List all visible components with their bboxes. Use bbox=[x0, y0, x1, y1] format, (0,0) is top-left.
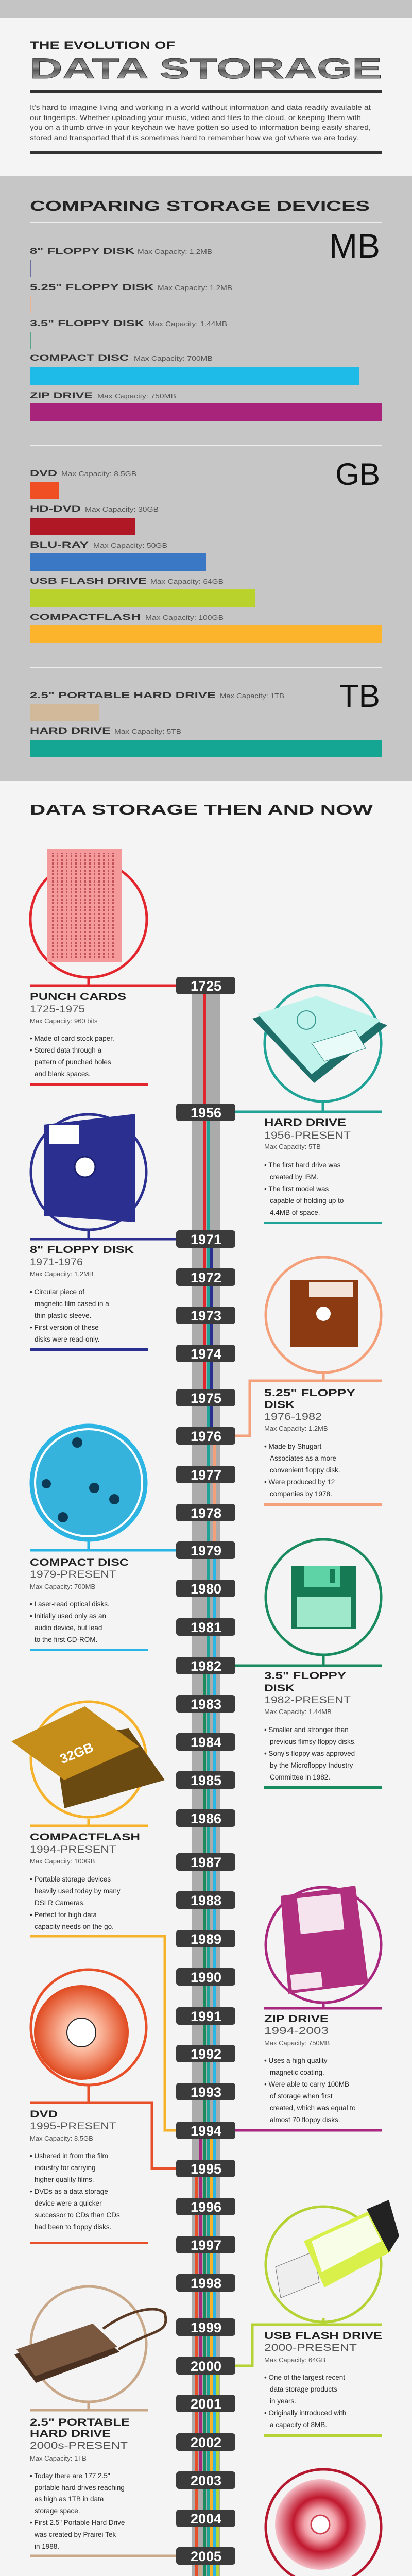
item: compact disc: audio device, but lead bbox=[35, 1624, 102, 1632]
item: dvd bbox=[30, 1970, 148, 2244]
item: compactflash: 1994-PRESENT bbox=[30, 1844, 116, 1855]
item: compact disc: • Laser-read optical disks. bbox=[30, 1600, 110, 1608]
bar: compactflash: Max Capacity: 100GB bbox=[145, 614, 224, 621]
icon: hd-dvd disc bbox=[266, 2469, 381, 2576]
year badges: 1999 bbox=[191, 2320, 221, 2335]
item: 3.5 floppy: DISK bbox=[264, 1683, 295, 1694]
item: portable hard drive: • Today there are 177 2.5" bbox=[30, 2472, 110, 2480]
item: zip drive: Max Capacity: 750MB bbox=[264, 2039, 330, 2047]
item: compactflash: • Perfect for high data bbox=[30, 1911, 97, 1919]
item: punch cards: Max Capacity: 960 bits bbox=[30, 1017, 98, 1025]
item: hd-dvd bbox=[264, 2469, 382, 2576]
bar: compact disc: Max Capacity: 700MB bbox=[134, 354, 213, 362]
item: punch cards: • Made of card stock paper. bbox=[30, 1035, 114, 1042]
bar: hard drive: HARD DRIVE bbox=[30, 726, 111, 736]
year badges: 1974 bbox=[191, 1346, 221, 1362]
item: dvd: • DVDs as a data storage bbox=[30, 2188, 108, 2195]
item: compactflash: Max Capacity: 100GB bbox=[30, 1857, 95, 1865]
item: compact disc: COMPACT DISC bbox=[30, 1557, 129, 1568]
item: compact disc bbox=[30, 1425, 148, 1651]
year badges: 2000 bbox=[191, 2359, 221, 2374]
item: portable hard drive: was created by Prairei Tek bbox=[34, 2531, 116, 2538]
item: compactflash: heavily used today by many bbox=[35, 1887, 121, 1895]
year badges: 1981 bbox=[191, 1620, 221, 1635]
item: compact disc: • Initially used only as an bbox=[30, 1612, 106, 1620]
intro paragraph: our fingertips. Whether uploading your music, video and files to the cloud, or keeping them with bbox=[30, 114, 361, 122]
item: portable hard drive: 2.5" PORTABLE bbox=[30, 2417, 130, 2428]
year badges: 2002 bbox=[191, 2435, 221, 2450]
item: portable hard drive: HARD DRIVE bbox=[30, 2429, 111, 2439]
heading: comparing: COMPARING STORAGE DEVICES bbox=[30, 198, 370, 214]
item: hard drive: capable of holding up to bbox=[270, 1197, 344, 1205]
item: dvd: • Ushered in from the film bbox=[30, 2152, 108, 2160]
bar: portable hd: 2.5" PORTABLE HARD DRIVE bbox=[30, 690, 216, 700]
item: usb flash drive: 2000-PRESENT bbox=[264, 2343, 357, 2353]
timeline spine bbox=[192, 986, 220, 2576]
bar: zip drive: ZIP DRIVE bbox=[30, 391, 93, 400]
item: 8in floppy: • First version of these bbox=[30, 1324, 99, 1331]
item: hard drive: created by IBM. bbox=[270, 1173, 319, 1181]
intro paragraph: It's hard to imagine living and working in a world without information and data readily available at bbox=[30, 104, 371, 111]
item: punch cards bbox=[30, 849, 148, 1086]
item: zip drive: magnetic coating. bbox=[270, 2069, 324, 2076]
item: 3.5 floppy: Max Capacity: 1.44MB bbox=[264, 1708, 332, 1716]
bar: dvd: DVD bbox=[30, 468, 57, 478]
bar: usb: USB FLASH DRIVE bbox=[30, 576, 147, 586]
item: 5.25 floppy: DISK bbox=[264, 1400, 295, 1411]
icon: punch card bbox=[30, 849, 147, 977]
bar: blu-ray: Max Capacity: 50GB bbox=[93, 541, 167, 549]
item: usb flash drive: data storage products bbox=[270, 2385, 337, 2393]
bar: 3.5 floppy: 3.5" FLOPPY DISK bbox=[30, 318, 145, 328]
item: 8in floppy: Max Capacity: 1.2MB bbox=[30, 1270, 94, 1278]
intro paragraph: you on a thumb drive in your keychain we have gotten so used to information being easily shared, bbox=[30, 124, 371, 131]
item: compactflash: capacity needs on the go. bbox=[35, 1923, 114, 1930]
year badges: 2003 bbox=[191, 2473, 221, 2488]
item: dvd: industry for carrying bbox=[35, 2164, 96, 2172]
year badges: 1995 bbox=[191, 2161, 221, 2177]
bar: dvd bbox=[30, 468, 136, 499]
unit TB: TB bbox=[339, 679, 380, 714]
year badges: 1997 bbox=[191, 2238, 221, 2253]
item: 5.25 floppy: companies by 1978. bbox=[270, 1490, 332, 1498]
year badges: 1985 bbox=[191, 1773, 221, 1788]
year badges: 1725 bbox=[191, 978, 221, 994]
year badges: 2001 bbox=[191, 2396, 221, 2412]
item: usb flash drive: USB FLASH DRIVE bbox=[264, 2331, 382, 2342]
year badges: 1972 bbox=[191, 1270, 221, 1285]
bar: zip drive: Max Capacity: 750MB bbox=[97, 392, 176, 400]
item: hard drive bbox=[252, 985, 387, 1224]
year badges: 1984 bbox=[191, 1735, 221, 1750]
year badges: 1973 bbox=[191, 1308, 221, 1324]
item: zip drive: almost 70 floppy disks. bbox=[270, 2116, 340, 2124]
icon: dvd disc bbox=[31, 1970, 146, 2085]
item: zip drive: • Were able to carry 100MB bbox=[264, 2080, 349, 2088]
intro paragraph: stored and transported that it is sometimes hard to remember how we got where we are today. bbox=[30, 134, 358, 142]
year badges: 1990 bbox=[191, 1970, 221, 1985]
item: 5.25 floppy: Associates as a more bbox=[270, 1454, 336, 1462]
item: hard drive: 1956-PRESENT bbox=[264, 1130, 351, 1141]
header bbox=[30, 40, 382, 154]
icon: usb stick bbox=[266, 2200, 399, 2322]
item: 3.5 floppy: 3.5" FLOPPY bbox=[264, 1671, 346, 1682]
year badges: 1989 bbox=[191, 1931, 221, 1947]
bar: compactflash bbox=[30, 612, 382, 643]
year badges: 1977 bbox=[191, 1467, 221, 1483]
bar: portable hd: Max Capacity: 1TB bbox=[220, 692, 284, 700]
item: 8in floppy: thin plastic sleeve. bbox=[35, 1312, 91, 1319]
bar: portable hd bbox=[30, 690, 284, 721]
item: dvd: had been to floppy disks. bbox=[35, 2223, 111, 2231]
item: dvd: Max Capacity: 8.5GB bbox=[30, 2134, 93, 2142]
item: usb flash drive: • One of the largest recent bbox=[264, 2374, 345, 2381]
year badges: 1986 bbox=[191, 1811, 221, 1826]
bar: 5.25 floppy: 5.25" FLOPPY DISK bbox=[30, 282, 154, 292]
item: portable hard drive: storage space. bbox=[35, 2507, 80, 2515]
item: 5.25 floppy: 5.25" FLOPPY bbox=[264, 1388, 355, 1399]
intro paragraph bbox=[30, 104, 371, 142]
item: hard drive: • The first hard drive was bbox=[264, 1161, 341, 1169]
year badges bbox=[176, 977, 235, 2576]
item: usb flash drive: Max Capacity: 64GB bbox=[264, 2356, 325, 2364]
bar: compactflash: COMPACTFLASH bbox=[30, 612, 141, 622]
year badges: 2004 bbox=[191, 2511, 221, 2527]
item: 3.5 floppy: 1982-PRESENT bbox=[264, 1695, 351, 1706]
year badges: 1982 bbox=[191, 1658, 221, 1674]
year badges: 1983 bbox=[191, 1697, 221, 1712]
item: 8in floppy bbox=[30, 1114, 148, 1351]
bar: usb bbox=[30, 576, 255, 607]
item: compactflash: COMPACTFLASH bbox=[30, 1832, 140, 1843]
unit GB: GB bbox=[335, 457, 380, 492]
bar: hd-dvd: HD-DVD bbox=[30, 504, 81, 514]
title big: DATA STORAGE bbox=[30, 52, 382, 84]
bar: 5.25 floppy: Max Capacity: 1.2MB bbox=[158, 284, 232, 292]
title small: THE EVOLUTION OF bbox=[30, 40, 175, 52]
item: 8in floppy: • Circular piece of bbox=[30, 1288, 84, 1296]
year badges: 1979 bbox=[191, 1543, 221, 1558]
top strip bbox=[0, 0, 412, 18]
bar: 8in floppy: Max Capacity: 1.2MB bbox=[138, 248, 212, 256]
item: 3.5 floppy: Committee in 1982. bbox=[270, 1773, 330, 1781]
item: compactflash: DSLR Cameras. bbox=[35, 1899, 85, 1907]
bar: zip drive bbox=[30, 391, 382, 421]
year badges: 1976 bbox=[191, 1429, 221, 1444]
item: compact disc: 1979-PRESENT bbox=[30, 1569, 116, 1580]
bar: dvd: Max Capacity: 8.5GB bbox=[61, 470, 136, 478]
bar: blu-ray: BLU-RAY bbox=[30, 540, 89, 550]
item: 5.25 floppy: convenient floppy disk. bbox=[270, 1466, 340, 1474]
item: compact disc: Max Capacity: 700MB bbox=[30, 1583, 95, 1590]
item: 3.5 floppy: • Smaller and stronger than bbox=[264, 1726, 349, 1734]
item: dvd: successor to CDs than CDs bbox=[35, 2211, 120, 2219]
item: portable hard drive bbox=[14, 2286, 166, 2550]
icon: 3.5 floppy bbox=[266, 1539, 381, 1655]
icon: 8in floppy bbox=[31, 1114, 146, 1230]
year badges: 1987 bbox=[191, 1855, 221, 1870]
item: hard drive: Max Capacity: 5TB bbox=[264, 1143, 321, 1150]
item: zip drive: ZIP DRIVE bbox=[264, 2014, 329, 2025]
bar: 5.25 floppy bbox=[30, 282, 232, 313]
year badges: 1992 bbox=[191, 2046, 221, 2062]
year badges: 1975 bbox=[191, 1391, 221, 1406]
item: 5.25 floppy: • Made by Shugart bbox=[264, 1443, 322, 1450]
icon: zip disk bbox=[266, 1886, 381, 2003]
item: dvd: higher quality films. bbox=[35, 2176, 94, 2183]
bar: usb: Max Capacity: 64GB bbox=[150, 578, 224, 585]
year badges: 2005 bbox=[191, 2549, 221, 2564]
year badges: 1993 bbox=[191, 2084, 221, 2100]
bar: blu-ray bbox=[30, 540, 206, 571]
item: hard drive: HARD DRIVE bbox=[264, 1117, 346, 1128]
item: zip drive: created, which was equal to bbox=[270, 2104, 356, 2112]
item: 3.5 floppy: by the Microfloppy Industry bbox=[270, 1761, 353, 1769]
item: zip drive bbox=[264, 1886, 381, 2124]
heading: then and now: DATA STORAGE THEN AND NOW bbox=[30, 802, 373, 818]
item: hard drive: • The first model was bbox=[264, 1185, 329, 1193]
bar: 3.5 floppy: Max Capacity: 1.44MB bbox=[148, 320, 227, 328]
item: portable hard drive: 2000s-PRESENT bbox=[30, 2441, 128, 2451]
item: punch cards: pattern of punched holes bbox=[35, 1058, 111, 1066]
item: dvd: 1995-PRESENT bbox=[30, 2121, 116, 2132]
bar: compact disc: COMPACT DISC bbox=[30, 353, 129, 363]
item: hard drive: 4.4MB of space. bbox=[270, 1209, 320, 1216]
item: usb flash drive: a capacity of 8MB. bbox=[270, 2421, 327, 2429]
bar: 8in floppy bbox=[30, 246, 212, 277]
item: portable hard drive: • First 2.5" Portable Hard Drive bbox=[30, 2519, 125, 2527]
item: 5.25 floppy: 1976-1982 bbox=[264, 1412, 322, 1422]
item: zip drive: of storage when first bbox=[270, 2092, 333, 2100]
item: portable hard drive: in 1988. bbox=[35, 2543, 59, 2550]
item: 3.5 floppy bbox=[264, 1539, 382, 1789]
item: usb flash drive bbox=[264, 2200, 399, 2437]
icon: 5.25 floppy bbox=[266, 1257, 381, 1372]
item: 5.25 floppy bbox=[264, 1257, 382, 1506]
item: 3.5 floppy: • Sony's floppy was approved bbox=[264, 1750, 355, 1757]
year badges: 1956 bbox=[191, 1105, 221, 1121]
unit MB: MB bbox=[329, 227, 380, 265]
year badges: 1991 bbox=[191, 2009, 221, 2024]
item: compactflash bbox=[11, 1702, 165, 1930]
item: compactflash: • Portable storage devices bbox=[30, 1875, 111, 1883]
item: 5.25 floppy: • Were produced by 12 bbox=[264, 1478, 335, 1486]
panel: comparing storage devices bbox=[0, 176, 412, 781]
icon: hard drive bbox=[252, 985, 387, 1101]
item: portable hard drive: as high as 1TB in data bbox=[35, 2495, 104, 2503]
year badges: 1978 bbox=[191, 1505, 221, 1521]
bar: hard drive bbox=[30, 726, 382, 757]
item: 8in floppy: 8" FLOPPY DISK bbox=[30, 1245, 134, 1256]
bar: 3.5 floppy bbox=[30, 318, 227, 349]
item: punch cards: • Stored data through a bbox=[30, 1046, 102, 1054]
bar: hd-dvd bbox=[30, 504, 159, 535]
item: usb flash drive: • Originally introduced with bbox=[264, 2409, 346, 2417]
item: zip drive: 1994-2003 bbox=[264, 2026, 329, 2037]
item: portable hard drive: Max Capacity: 1TB bbox=[30, 2454, 87, 2462]
icon: discs bbox=[31, 1425, 146, 1540]
item: 8in floppy: magnetic film cased in a bbox=[35, 1300, 109, 1308]
year badges: 1971 bbox=[191, 1232, 221, 1247]
item: 8in floppy: disks were read-only. bbox=[35, 1335, 100, 1343]
bar: 8in floppy: 8" FLOPPY DISK bbox=[30, 246, 135, 256]
bar: compact disc bbox=[30, 353, 359, 385]
item: punch cards: and blank spaces. bbox=[35, 1070, 91, 1078]
item: portable hard drive: portable hard drives reaching bbox=[35, 2484, 125, 2492]
year badges: 1980 bbox=[191, 1581, 221, 1597]
year badges: 1998 bbox=[191, 2276, 221, 2291]
connector lines bbox=[30, 978, 382, 2576]
year badges: 1988 bbox=[191, 1893, 221, 1908]
item: 3.5 floppy: previous flimsy floppy disks. bbox=[270, 1738, 356, 1745]
item: punch cards: PUNCH CARDS bbox=[30, 992, 126, 1003]
item: 5.25 floppy: Max Capacity: 1.2MB bbox=[264, 1425, 328, 1432]
item: 8in floppy: 1971-1976 bbox=[30, 1257, 83, 1268]
item: dvd: device were a quicker bbox=[35, 2199, 102, 2207]
year badges: 1996 bbox=[191, 2199, 221, 2215]
icon: memory card: 32GB bbox=[58, 1739, 96, 1767]
item: punch cards: 1725-1975 bbox=[30, 1004, 85, 1015]
item: compact disc: to the first CD-ROM. bbox=[35, 1636, 97, 1643]
item: dvd: DVD bbox=[30, 2109, 58, 2120]
icon: memory card bbox=[11, 1702, 165, 1817]
icon: portable drive bbox=[14, 2286, 166, 2402]
item: usb flash drive: in years. bbox=[270, 2397, 296, 2405]
year badges: 1994 bbox=[191, 2123, 221, 2139]
bar: hard drive: Max Capacity: 5TB bbox=[114, 727, 181, 735]
bar: hd-dvd: Max Capacity: 30GB bbox=[85, 505, 159, 513]
item: zip drive: • Uses a high quality bbox=[264, 2057, 328, 2064]
